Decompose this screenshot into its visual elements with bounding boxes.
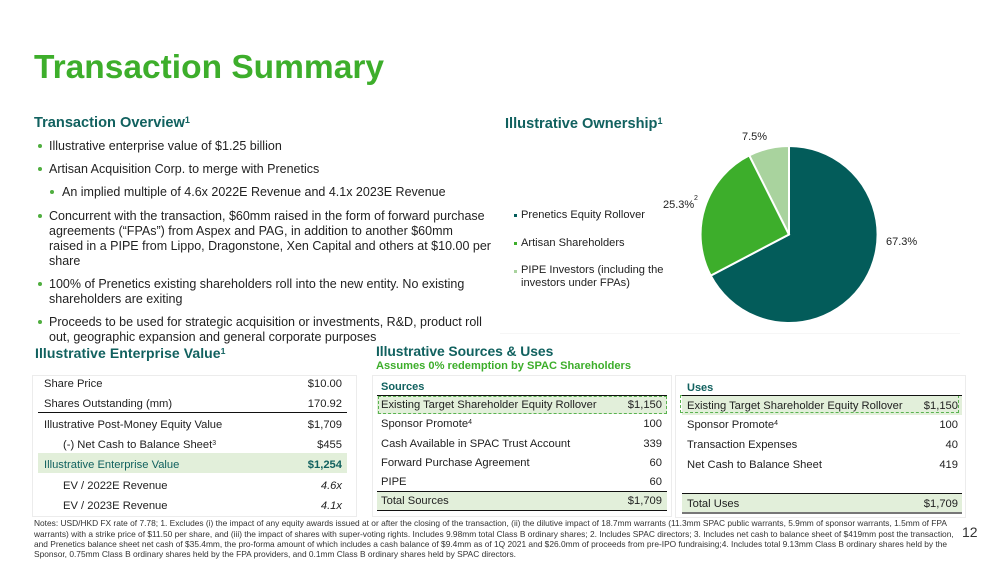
sources rows: Cash Available in SPAC Trust Account [381, 438, 570, 450]
enterprise value rows: 170.92 [308, 398, 342, 410]
enterprise value rows: $1,709 [308, 419, 342, 431]
slice: Artisan 25.3% [701, 155, 789, 276]
heading: illustrative ownership: Illustrative Ownership1 [505, 116, 663, 132]
sources rows: PIPE [381, 476, 406, 488]
panel: enterprise value table [32, 375, 357, 517]
footnotes: and Prenetics balance sheet net cash of $35.4mm, the pro-forma amount of which includes a cash balance of $9.4mm as of 1Q 2021 and $26.0mm of proceeds from pre-IPO fundraising;4. Includes total 9.13mm Class B ordinary shares held by the [34, 538, 947, 548]
uses rows: $1,709 [924, 498, 958, 510]
bullet list: raised in a PIPE from Lippo, Dragonstone, Xen Capital and others at $10.00 per [49, 239, 491, 253]
uses rows: Existing Target Shareholder Equity Rollover [687, 400, 903, 412]
bullet list: out, geographic expansion and general corporate purposes [49, 330, 376, 344]
enterprise value rows: Illustrative Post-Money Equity Value [44, 419, 222, 431]
uses rows: Net Cash to Balance Sheet [687, 459, 822, 471]
subheading: redemption assumption: Assumes 0% redemption by SPAC Shareholders [376, 360, 631, 372]
footnotes: warrants) with a strike price of $11.50 per share, and (iii) the impact of shares with super-voting rights. Includes 9.98mm total Class B ordinary shares; 2. Includes SPAC directors; 3. Includes net cash to balance sheet of $419mm post the transaction, [34, 528, 954, 538]
heading: illustrative enterprise value: Illustrative Enterprise Value1 [35, 345, 226, 361]
pie chart: ownership [663, 131, 917, 322]
bullet list: An implied multiple of 4.6x 2022E Revenue and 4.1x 2023E Revenue [62, 185, 446, 199]
enterprise value rows: $455 [317, 439, 342, 451]
sources rows: 60 [650, 476, 662, 488]
label 7.5%: 7.5% [742, 131, 767, 143]
title: Transaction Summary [34, 48, 384, 86]
enterprise value rows: 4.1x [321, 500, 342, 512]
uses rows: 100 [939, 419, 958, 431]
legend: ownership: PIPE Investors (including the [521, 264, 663, 276]
bullet list: shareholders are exiting [49, 292, 182, 306]
enterprise value rows: EV / 2023E Revenue [63, 500, 168, 512]
bullet list: share [49, 254, 80, 268]
label 67.3%: 67.3% [886, 236, 917, 248]
footnotes [34, 518, 954, 558]
slice: PIPE 7.5% [749, 146, 789, 234]
label 25.3%: 25.3% [663, 199, 694, 211]
sources rows: Forward Purchase Agreement [381, 457, 530, 469]
footnote 2: 2 [694, 195, 698, 202]
bullet list: Illustrative enterprise value of $1.25 billion [49, 139, 282, 153]
panel: transaction overview [34, 115, 491, 344]
heading: transaction overview: Transaction Overview1 [34, 115, 190, 131]
enterprise value rows: $1,254 [308, 459, 342, 471]
bullet list: 100% of Prenetics existing shareholders roll into the new entity. No existing [49, 277, 464, 291]
sources rows: $1,150 [628, 399, 662, 411]
sources rows: Sources [381, 381, 424, 393]
sources rows: 339 [643, 438, 662, 450]
legend: ownership [514, 209, 663, 289]
page number: 12 [962, 524, 978, 540]
legend: ownership: investors under FPAs) [521, 277, 630, 289]
bullet list: agreements (“FPAs”) from Aspex and PAG, in addition to another $60mm [49, 224, 453, 238]
heading: illustrative sources and uses: Illustrative Sources & Uses [376, 343, 553, 359]
bullet list: Concurrent with the transaction, $60mm raised in the form of forward purchase [49, 209, 485, 223]
uses rows: $1,150 [924, 400, 958, 412]
footnotes: Notes: USD/HKD FX rate of 7.78; 1. Excludes (i) the impact of any equity awards issued at or after the closing of the transaction, (ii) the dilutive impact of 18.7mm warrants (11.3mm SPAC public warrants, 5.9mm of sponsor warrants, 1.5mm of FPA [34, 518, 947, 528]
sources rows: $1,709 [628, 495, 662, 507]
bullet list: Proceeds to be used for strategic acquisition or investments, R&D, product roll [49, 315, 482, 329]
sources rows: 100 [643, 418, 662, 430]
sources rows: Existing Target Shareholder Equity Rollover [381, 399, 597, 411]
panel: uses table [675, 375, 966, 518]
enterprise value rows: 4.6x [321, 480, 342, 492]
enterprise value rows: Share Price [44, 378, 102, 390]
uses rows: Sponsor Promote4 [687, 419, 778, 431]
sources rows: Total Sources [381, 495, 449, 507]
legend: ownership: Prenetics Equity Rollover [521, 209, 645, 221]
slice: Prenetics 67.3% [711, 146, 878, 323]
uses rows: Total Uses [687, 498, 739, 510]
legend: ownership: Artisan Shareholders [521, 237, 625, 249]
enterprise value rows: EV / 2022E Revenue [63, 480, 168, 492]
footnotes: Sponsor, 0.75mm Class B ordinary shares held by the FPA providers, and 0.1mm Class B ordinary shares held by SPAC directors. [34, 548, 516, 558]
uses rows: Transaction Expenses [687, 439, 797, 451]
enterprise value rows: (-) Net Cash to Balance Sheet3 [63, 439, 216, 451]
enterprise value rows: Illustrative Enterprise Value [44, 459, 179, 471]
bullet list [38, 139, 491, 344]
enterprise value rows: $10.00 [308, 378, 342, 390]
uses rows: Uses [687, 382, 713, 394]
panel: sources table [372, 375, 672, 517]
uses rows: 40 [946, 439, 958, 451]
bullet list: Artisan Acquisition Corp. to merge with Prenetics [49, 162, 319, 176]
enterprise value rows: Shares Outstanding (mm) [44, 398, 172, 410]
sources rows: 60 [650, 457, 662, 469]
sources rows: Sponsor Promote4 [381, 418, 472, 430]
uses rows: 419 [939, 459, 958, 471]
